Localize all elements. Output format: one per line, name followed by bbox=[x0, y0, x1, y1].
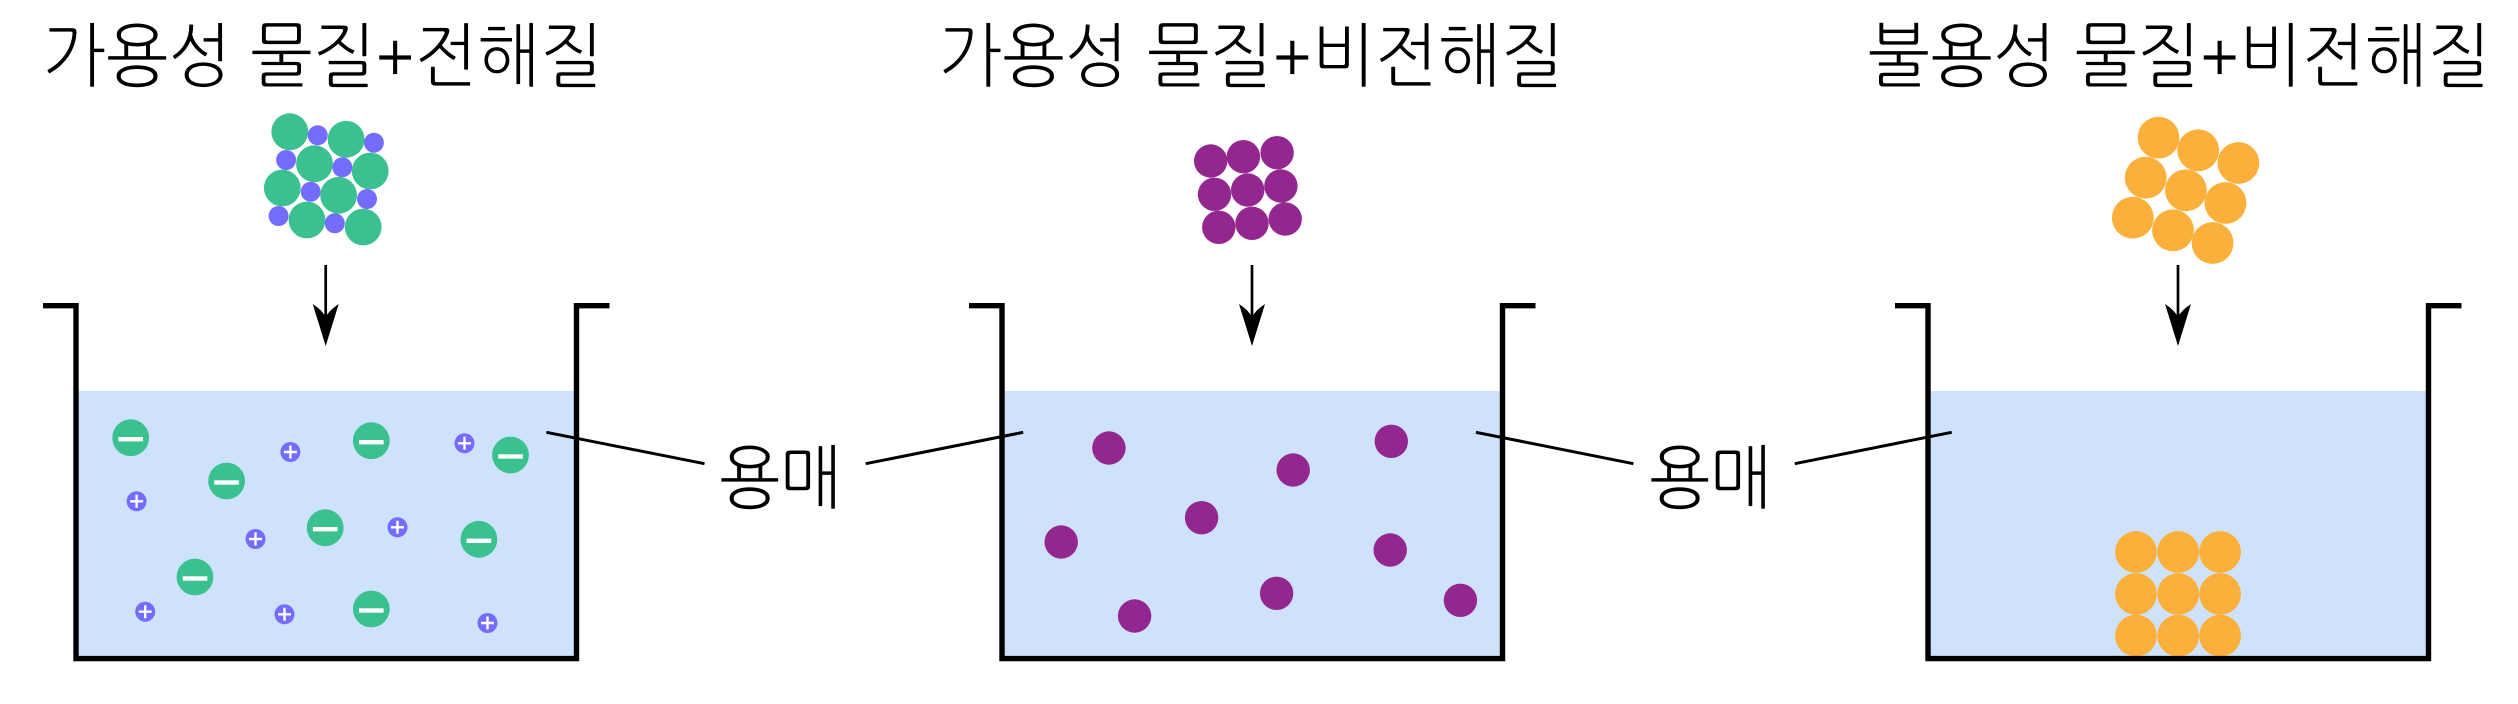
beaker 3 outline bbox=[1895, 306, 2462, 659]
dissolved green anions bbox=[112, 419, 529, 627]
solid cluster: orange particles bbox=[2112, 117, 2259, 264]
solid cluster: green and blue ions bbox=[264, 113, 389, 245]
beaker 1 with dissolved ions bbox=[43, 306, 610, 659]
solvent 3 bbox=[1928, 391, 2429, 659]
leader line: solvent to beaker 3 bbox=[1795, 432, 1952, 464]
arrow: into beaker 1 bbox=[313, 265, 339, 346]
dissolved blue cations bbox=[127, 433, 498, 633]
beaker 1 outline bbox=[43, 306, 610, 659]
beaker 2 with dissolved particles bbox=[969, 306, 1536, 659]
title: insoluble non-electrolyte: 불용성 물질+비전해질 bbox=[1867, 18, 2490, 96]
beaker 3 with settled particles bbox=[1895, 306, 2462, 659]
solvent 1 bbox=[76, 391, 577, 659]
dissolved purple particles bbox=[1044, 425, 1477, 633]
settled orange particles bbox=[2115, 531, 2241, 657]
arrow: into beaker 2 bbox=[1239, 265, 1265, 346]
beaker 2 outline bbox=[969, 306, 1536, 659]
leader line: solvent to beaker 2 left bbox=[866, 432, 1023, 464]
label: solvent right: 용매 bbox=[1649, 440, 1772, 518]
title: soluble electrolyte: 가용성 물질+전해질 bbox=[43, 18, 603, 96]
solid cluster: purple particles bbox=[1194, 136, 1302, 244]
arrow: into beaker 3 bbox=[2165, 265, 2191, 346]
title: soluble non-electrolyte: 가용성 물질+비전해질 bbox=[939, 18, 1564, 96]
solvent 2 bbox=[1002, 391, 1503, 659]
leader line: solvent to beaker 2 right bbox=[1476, 432, 1633, 464]
label: solvent left: 용매 bbox=[719, 440, 842, 518]
leader line: solvent to beaker 1 bbox=[546, 432, 704, 464]
